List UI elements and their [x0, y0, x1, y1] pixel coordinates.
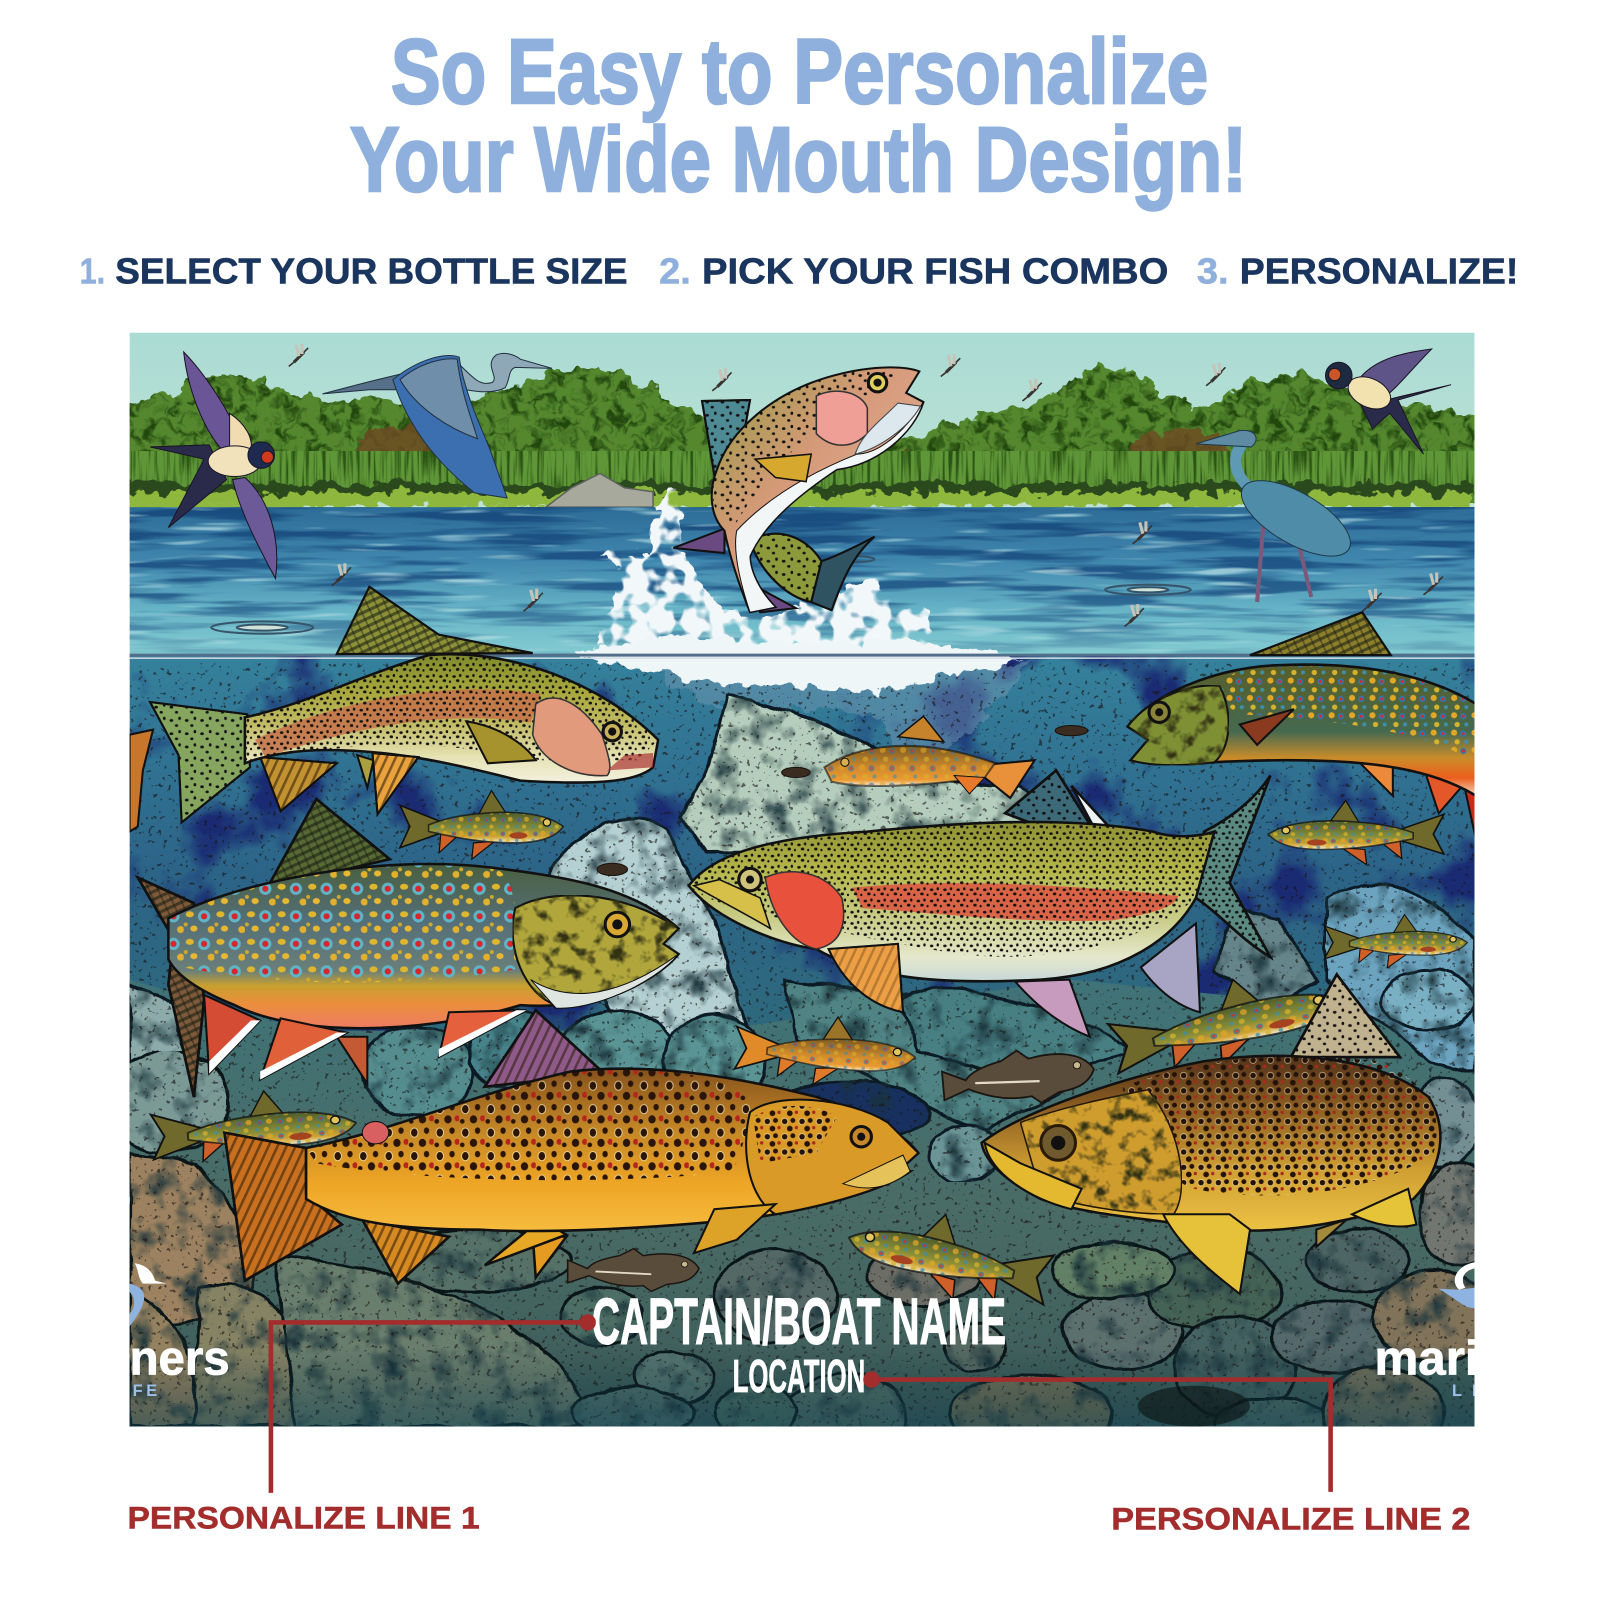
small fish: upper right — [1268, 801, 1444, 865]
second jumping fish — [747, 534, 874, 612]
sky — [130, 333, 1474, 516]
steps row: SELECT YOUR BOTTLE SIZE — [115, 251, 628, 292]
small fish: bottom center — [841, 1196, 1058, 1318]
logo left fragment: ners — [130, 1332, 230, 1385]
steps row: PICK YOUR FISH COMBO — [702, 251, 1168, 292]
personalized line 2 text: LOCATION — [733, 1350, 865, 1402]
small fish at left edge — [130, 730, 153, 832]
personalized line 1 text: CAPTAIN/BOAT NAME — [592, 1285, 1006, 1359]
brook trout left — [138, 799, 679, 1097]
steps row: PERSONALIZE! — [1240, 251, 1518, 292]
belly — [736, 402, 923, 612]
title — [350, 21, 1247, 211]
logo left fragment — [130, 1263, 230, 1400]
small fish: lower left — [150, 1085, 358, 1172]
small fish: center — [734, 1012, 917, 1090]
small brown trout top center — [824, 716, 1035, 798]
title: So Easy to Personalize — [391, 21, 1208, 123]
swallow left — [150, 352, 277, 579]
brook trout top right — [1128, 612, 1480, 847]
sculpin: bottom — [568, 1249, 699, 1291]
steps row — [80, 251, 1518, 292]
callout line 2 — [863, 1371, 1331, 1492]
small fish: right — [1324, 915, 1467, 968]
tree line — [102, 365, 1500, 500]
small fish: upper left — [400, 791, 563, 859]
brown trout left — [224, 1010, 918, 1284]
flies — [289, 344, 1443, 627]
shore rock — [546, 473, 653, 507]
brown undergrowth — [357, 422, 1230, 451]
reeds — [130, 451, 1474, 492]
river bed — [130, 980, 1474, 1427]
steps row: 3. — [1197, 251, 1229, 292]
nymphs — [597, 726, 1088, 876]
flying heron — [322, 353, 552, 498]
lower rocks — [130, 1051, 1474, 1426]
rainbow trout top left — [150, 587, 658, 822]
label personalize line 2: PERSONALIZE LINE 2 — [1111, 1501, 1470, 1537]
steps row: 2. — [659, 251, 691, 292]
small fish: center right — [1106, 978, 1324, 1076]
logo right fragment: mari — [1374, 1332, 1479, 1385]
standing heron — [1196, 430, 1362, 602]
logo right fragment: LI — [1452, 1382, 1477, 1400]
swallow right — [1326, 349, 1451, 454]
brown trout right — [982, 974, 1440, 1294]
river surface — [130, 507, 1474, 658]
steps row: 1. — [80, 251, 105, 292]
label personalize line 1: PERSONALIZE LINE 1 — [128, 1500, 480, 1536]
logo right fragment — [1374, 1262, 1479, 1400]
paint speckle — [130, 663, 1474, 1427]
underwater — [130, 656, 1474, 1085]
dark depth at bottom — [130, 1356, 1474, 1426]
title: Your Wide Mouth Design! — [350, 109, 1247, 211]
rainbow trout center — [689, 770, 1270, 1037]
logo left fragment: FE — [133, 1382, 157, 1400]
panel: trout river artwork — [102, 333, 1500, 1459]
leaping rainbow trout — [673, 367, 923, 612]
bank — [130, 484, 1474, 526]
upper boulders — [130, 694, 1480, 1182]
ripples — [211, 556, 1191, 634]
sculpin: center — [941, 1044, 1096, 1111]
callout line 1 — [271, 1314, 596, 1493]
light shaft under splash — [653, 663, 1031, 760]
splash — [130, 488, 1474, 694]
